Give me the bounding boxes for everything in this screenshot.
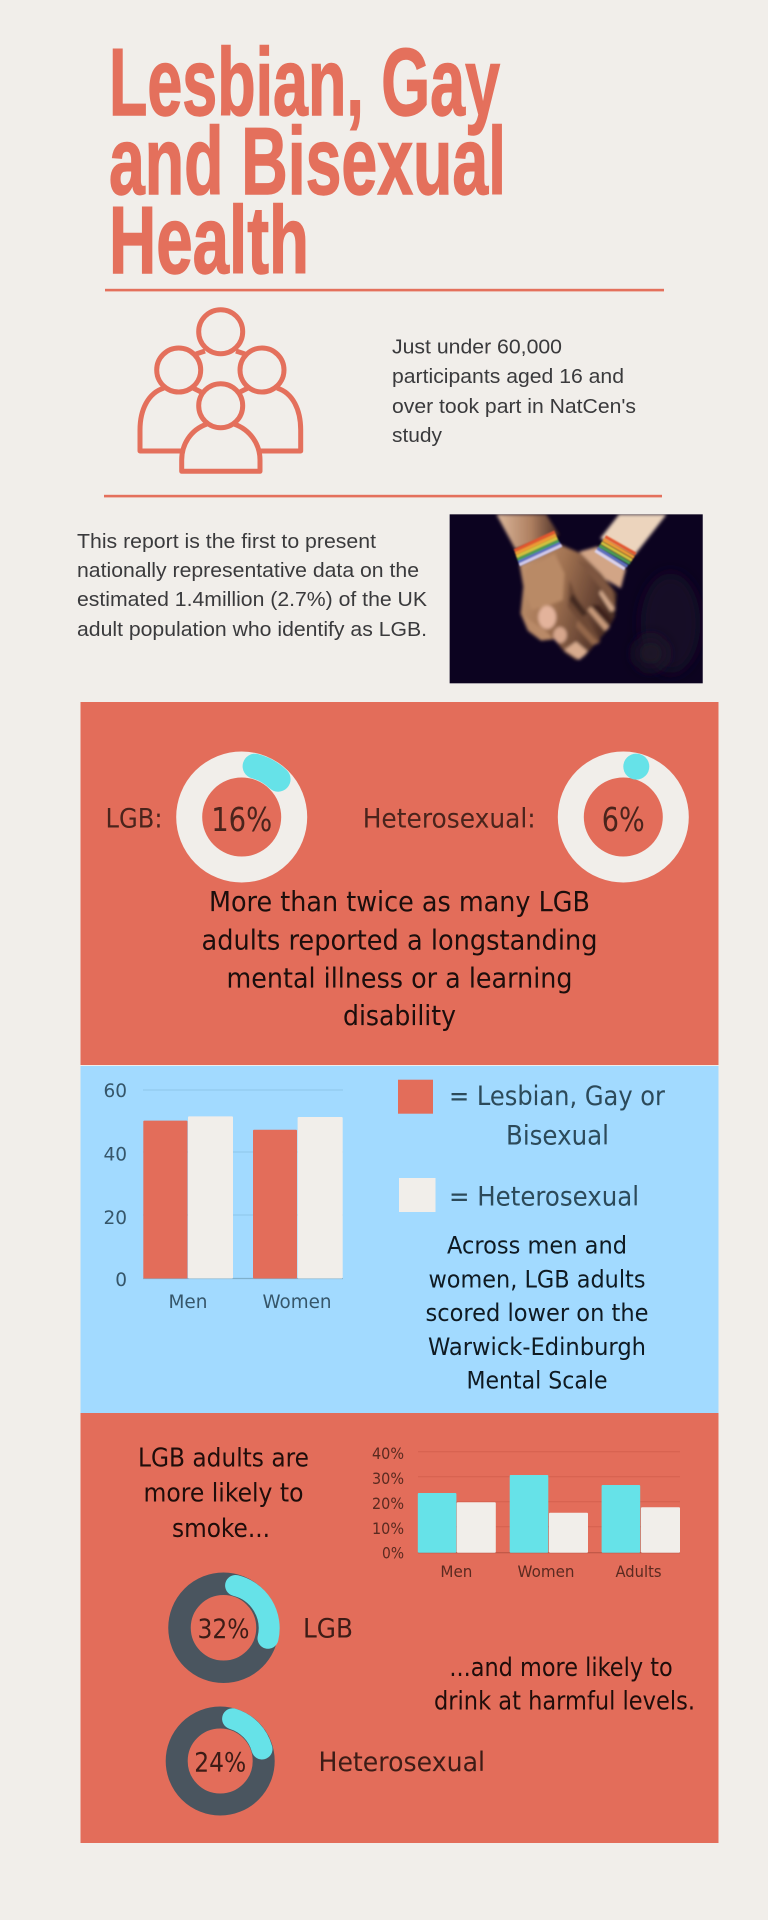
title [109, 29, 506, 294]
donut: LGB 16% [189, 764, 294, 870]
text: Warwick-Edinburgh [426, 1232, 648, 1395]
text: more than twice: mental illness or a learning [226, 962, 572, 994]
title: Lesbian, Gay [109, 29, 500, 136]
bar chart: mental wellbeing scale: 40 [103, 1144, 127, 1166]
text: more likely to smoke: smoke... [172, 1514, 270, 1544]
bar chart: mental wellbeing scale: Women [262, 1292, 332, 1313]
text: more likely to smoke: LGB adults are [138, 1444, 309, 1474]
legend: = Heterosexual [449, 1182, 639, 1212]
icon: group of people [140, 310, 301, 471]
text: Warwick-Edinburgh: women, LGB adults [428, 1266, 646, 1294]
text: more than twice: adults reported a longstanding [202, 924, 598, 956]
text: more likely to drink [434, 1653, 695, 1716]
text: more likely to drink: ...and more likely to [449, 1653, 673, 1683]
legend: Bisexual [506, 1120, 609, 1151]
text: participants: over took part in NatCen's [392, 396, 636, 418]
title: and Bisexual [109, 108, 506, 215]
label: Heterosexual: Heterosexual: [363, 804, 536, 835]
text: participants [392, 336, 636, 447]
text: Warwick-Edinburgh: Warwick-Edinburgh [428, 1333, 646, 1361]
text: more than twice: More than twice as many LGB [209, 886, 590, 918]
text: report intro: estimated 1.4million (2.7%) of the UK [77, 589, 428, 611]
label: LGB smoking: LGB [303, 1613, 353, 1644]
text: Warwick-Edinburgh: scored lower on the [426, 1299, 648, 1327]
text: participants: participants aged 16 and [392, 366, 624, 388]
text: more than twice [202, 886, 598, 1032]
donut: LGB 32%: 32% [198, 1614, 250, 1645]
bar chart: mental wellbeing scale: 20 [103, 1208, 127, 1229]
text: more than twice: disability [343, 1000, 456, 1032]
text: report intro: nationally representative data on the [77, 560, 419, 582]
legend: = Lesbian, Gay or [449, 1081, 666, 1112]
panel: mental illness [80, 702, 718, 1065]
bar chart: drinking: Adults [616, 1562, 662, 1581]
bar chart: drinking [372, 1444, 680, 1581]
panel: wellbeing [80, 1066, 718, 1413]
bar chart: drinking: 40% [372, 1444, 404, 1463]
photo: joined hands with rainbow wristbands [450, 514, 703, 683]
text: participants: Just under 60,000 [392, 336, 562, 358]
donut: heterosexual 6% [571, 754, 676, 870]
label: LGB: LGB: [106, 804, 162, 835]
donut: heterosexual 24%: 24% [194, 1748, 246, 1779]
bar chart: drinking: Men [440, 1562, 472, 1581]
label: heterosexual smoking: Heterosexual [318, 1747, 485, 1778]
bar chart: drinking: 0% [382, 1544, 404, 1563]
text: report intro: adult population who identify as LGB. [77, 619, 427, 641]
bar chart: drinking: 10% [372, 1519, 404, 1538]
text: participants: study [392, 425, 442, 447]
text: Warwick-Edinburgh: Mental Scale [466, 1367, 608, 1395]
bar chart: drinking: 30% [372, 1469, 404, 1488]
text: more likely to drink: drink at harmful levels. [434, 1686, 695, 1716]
donut: LGB 16%: 16% [211, 800, 272, 839]
text: Warwick-Edinburgh: Across men and [447, 1232, 627, 1260]
text: report intro: This report is the first to present [77, 531, 376, 553]
bar chart: drinking: Women [518, 1562, 574, 1581]
bar chart: drinking: 20% [372, 1494, 404, 1513]
panel: smoking and drinking [80, 1413, 718, 1843]
text: more likely to smoke: more likely to [144, 1479, 304, 1509]
bar chart: mental wellbeing scale: 0 [115, 1270, 127, 1291]
text: report intro [77, 531, 428, 641]
bar chart: mental wellbeing scale: 60 [103, 1081, 127, 1102]
donut: heterosexual 24% [177, 1718, 264, 1804]
title: Health [109, 187, 309, 294]
text: more likely to smoke [138, 1444, 309, 1544]
donut: heterosexual 6%: 6% [602, 800, 645, 839]
bar chart: mental wellbeing scale: Men [168, 1292, 208, 1313]
legend [398, 1080, 666, 1212]
donut: LGB 32% [180, 1584, 269, 1672]
bar chart: mental wellbeing scale [103, 1081, 343, 1313]
